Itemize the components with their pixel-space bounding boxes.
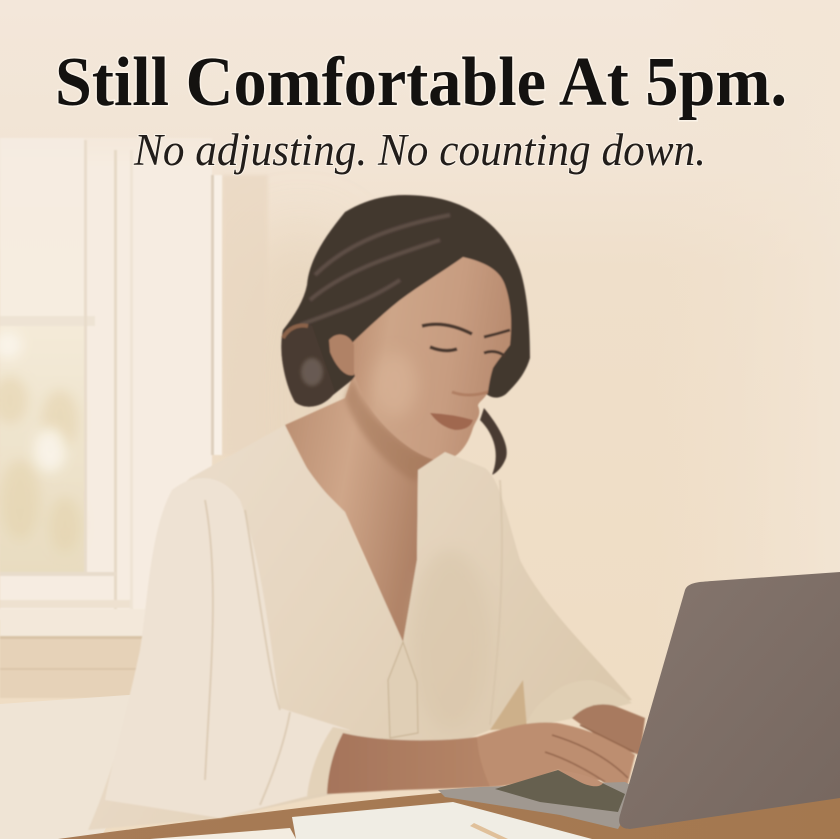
neck and chest [285,375,445,642]
blouse shadow [410,550,490,730]
bun [281,324,335,407]
laptop [438,572,840,829]
woman [88,195,645,830]
hair back [281,195,530,407]
laptop base [438,782,640,829]
right forearm [572,704,645,755]
chair [0,694,143,839]
subtitle: No adjusting. No counting down. [133,125,706,175]
window [0,138,222,620]
window sill [0,609,146,698]
left forearm [327,733,490,794]
laptop fingers overlap [558,770,603,786]
blouse placket [388,642,418,738]
ear [329,335,354,375]
left sleeve [105,478,350,818]
hair highlight strands [300,215,450,325]
laptop lid [619,572,840,829]
blouse body [88,425,632,830]
gap under right arm [490,680,527,730]
hair wisp [480,408,507,475]
face [350,257,511,461]
right cuff [525,680,632,728]
title: Still Comfortable At 5pm. [55,44,787,121]
table [58,793,840,839]
left cuff [307,727,353,796]
finger lines [545,725,634,782]
nose [452,392,488,395]
pencil [470,823,508,839]
sleeve folds [205,480,502,805]
cheek light [373,353,417,417]
notebook [150,802,592,839]
lips [430,413,473,430]
neck shadow [345,378,432,482]
laptop keyboard [495,770,625,812]
eyes and brows [422,324,510,356]
left hand [477,722,635,795]
